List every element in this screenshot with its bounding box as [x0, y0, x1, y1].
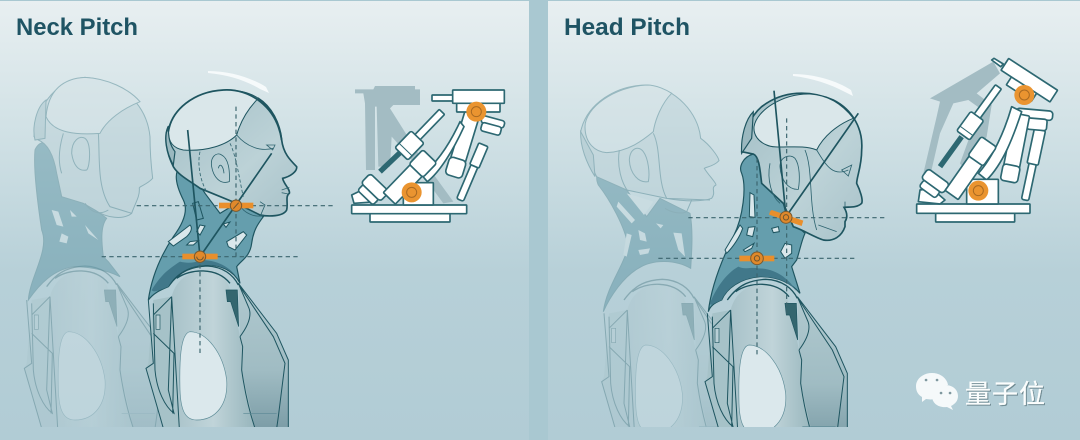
figure: head pitch foreground pose — [658, 91, 885, 440]
joint: upper — [769, 210, 803, 226]
title: head pitch: Head Pitch — [564, 14, 690, 41]
figure: neck pitch ghost pose — [24, 77, 167, 428]
far right rod — [1019, 129, 1045, 201]
neck plate — [148, 165, 263, 300]
link lines — [774, 91, 858, 217]
link lines — [188, 130, 272, 257]
head — [166, 98, 297, 216]
dashed axes — [102, 107, 335, 355]
base plates — [370, 213, 450, 222]
shadow pose — [923, 62, 1000, 177]
base pivot — [968, 181, 988, 201]
neck plate — [708, 154, 805, 312]
robot: neck pitch mechanism — [352, 86, 505, 222]
disc — [1015, 108, 1053, 131]
face details — [769, 150, 852, 232]
arrow: neck pitch rotation — [208, 71, 269, 93]
actuator pivot — [466, 102, 486, 122]
title: neck pitch: Neck Pitch — [16, 14, 138, 41]
base pivot — [402, 182, 422, 202]
shadow pose — [355, 86, 453, 203]
neck plate openings — [168, 202, 247, 250]
joint: upper — [219, 200, 253, 211]
head — [742, 93, 862, 240]
panel: neck pitch — [0, 1, 529, 440]
neck plate openings — [725, 193, 792, 258]
face details — [211, 135, 273, 217]
arrow: head pitch rotation — [793, 74, 853, 96]
far right rod — [455, 143, 488, 202]
top platform — [1006, 76, 1037, 101]
logo text: 量子位 — [965, 379, 1045, 409]
left actuator — [918, 188, 945, 204]
right cylinder — [445, 110, 481, 179]
joint: lower — [182, 251, 218, 262]
disc — [479, 115, 505, 136]
main cylinder — [944, 136, 997, 200]
joint: lower — [739, 252, 774, 265]
torso — [705, 279, 847, 440]
left actuator — [352, 189, 377, 203]
curved strut — [978, 107, 1022, 180]
right cylinder — [1000, 113, 1030, 183]
dashed axes — [658, 118, 885, 357]
figure: neck pitch foreground pose — [102, 90, 335, 428]
icon: wechat bubbles — [916, 373, 958, 410]
main cylinder — [382, 150, 437, 205]
torso — [146, 266, 288, 428]
top platform — [457, 103, 500, 112]
panel: head pitch — [548, 1, 1080, 440]
curved strut — [422, 122, 464, 182]
robot: head pitch mechanism — [916, 58, 1058, 222]
base plates — [936, 213, 1015, 222]
figure: head pitch ghost pose — [580, 84, 720, 427]
actuator pivot — [1014, 85, 1034, 105]
